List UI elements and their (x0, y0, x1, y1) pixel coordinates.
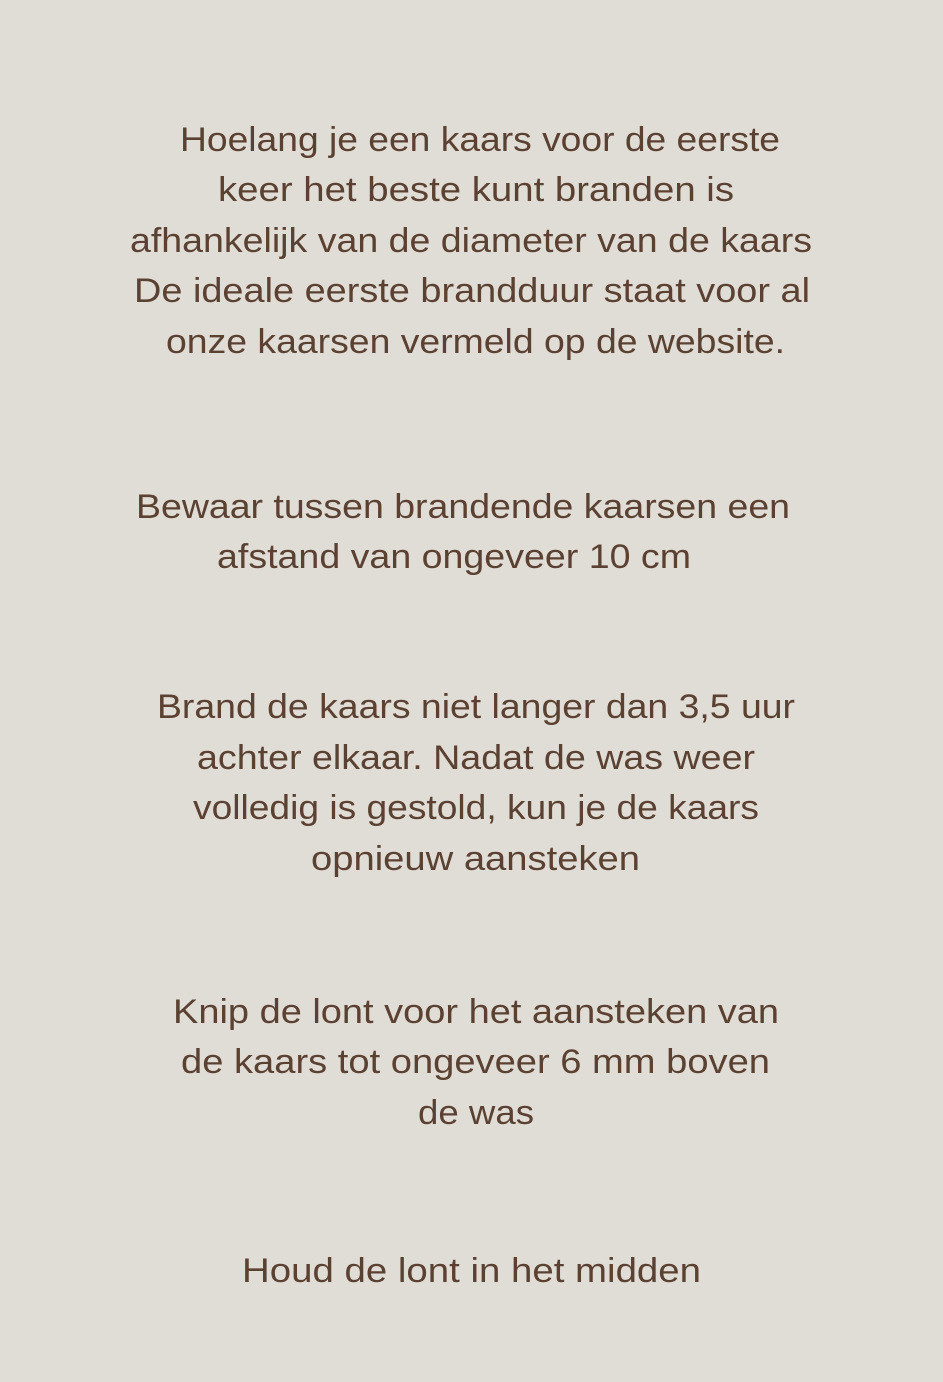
text block: first burn duration: onze kaarsen vermeld op de website. (166, 323, 785, 361)
text block: maximum burn time: volledig is gestold, kun je de kaars (193, 789, 759, 827)
text block: first burn duration: Hoelang je een kaars voor de eerste (180, 121, 780, 159)
text block: maximum burn time (157, 688, 795, 878)
text block: trim the wick (173, 993, 779, 1132)
text block: trim the wick: de was (418, 1094, 534, 1132)
text block: distance between candles: afstand van ongeveer 10 cm (217, 538, 691, 576)
text block: trim the wick: Knip de lont voor het aansteken van (173, 993, 779, 1031)
text block: first burn duration: keer het beste kunt branden is (218, 171, 734, 209)
text block: maximum burn time: opnieuw aansteken (311, 840, 640, 878)
text block: distance between candles (136, 488, 790, 576)
text block: distance between candles: Bewaar tussen brandende kaarsen een (136, 488, 790, 526)
text block: first burn duration: De ideale eerste brandduur staat voor al (134, 272, 810, 310)
text block: maximum burn time: achter elkaar. Nadat de was weer (197, 739, 755, 777)
text block: first burn duration: afhankelijk van de diameter van de kaars (130, 222, 812, 260)
text block: keep wick centred: Houd de lont in het midden (242, 1252, 701, 1290)
text block: maximum burn time: Brand de kaars niet langer dan 3,5 uur (157, 688, 795, 726)
text block: first burn duration (130, 121, 812, 361)
text block: trim the wick: de kaars tot ongeveer 6 mm boven (181, 1043, 770, 1081)
